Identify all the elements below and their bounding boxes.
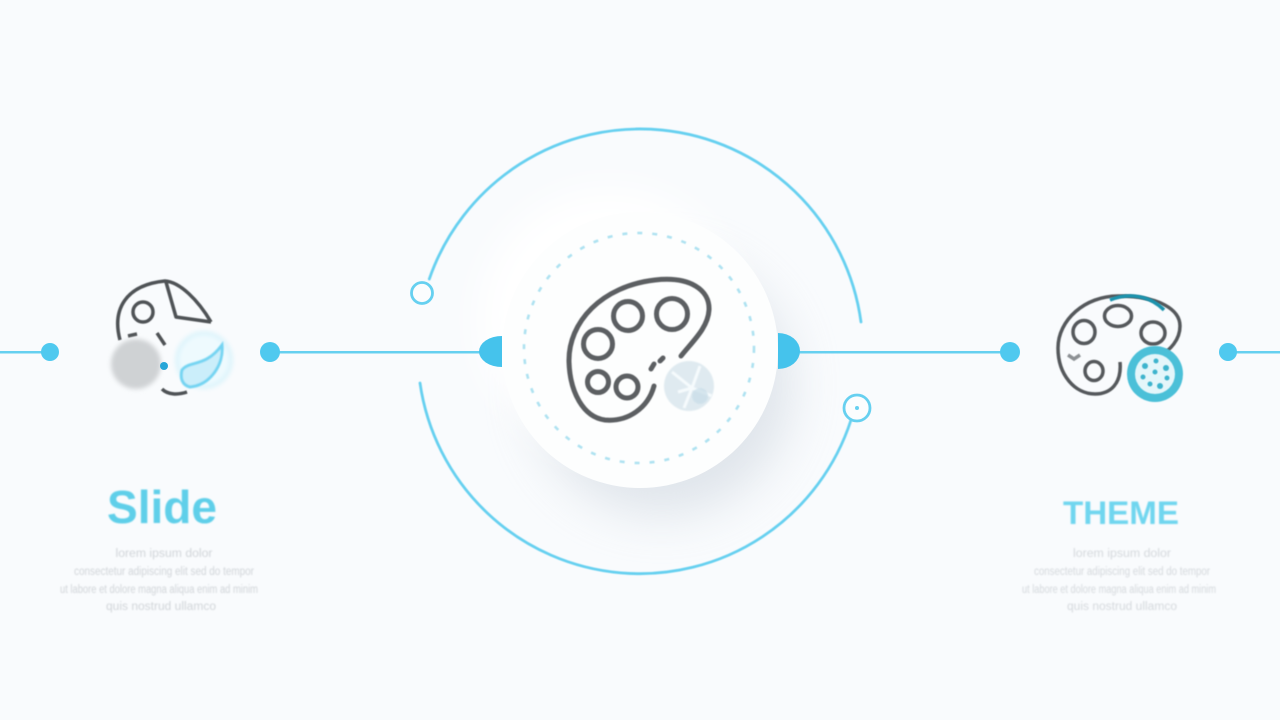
lower arc: [420, 383, 851, 574]
icon: left palette: [111, 281, 231, 394]
icon: crystal smudge on palette: [664, 361, 714, 411]
connector: left to centre: [260, 336, 502, 367]
teal badge: [1127, 346, 1183, 402]
connector: far right: [1219, 343, 1280, 361]
heading: Slide: Slide: [107, 481, 217, 533]
text block: right description: [1022, 548, 1216, 613]
heading: THEME: THEME: [1063, 495, 1179, 531]
text block: left description: ut labore et dolore magna aliqua enim ad minim: [60, 584, 258, 596]
dashed ring: [524, 233, 754, 463]
upper arc: [429, 129, 861, 322]
connector: far left: [0, 343, 59, 361]
connector: centre to right: [778, 333, 1020, 369]
text block: right description: ut labore et dolore magna aliqua enim ad minim: [1022, 584, 1216, 596]
central disc: [502, 212, 778, 488]
text block: right description: lorem ipsum dolor: [1073, 548, 1171, 560]
icon: right palette: [1058, 296, 1183, 402]
text block: right description: quis nostrud ullamco: [1067, 601, 1177, 613]
grey smudge: [111, 339, 161, 389]
ring marker: lower arc end: [844, 395, 870, 421]
icon: centre palette: [569, 279, 709, 420]
text block: left description: consectetur adipiscing elit sed do tempor: [74, 566, 254, 578]
text block: left description: quis nostrud ullamco: [106, 601, 216, 613]
text block: left description: [60, 548, 258, 613]
text block: right description: consectetur adipiscing elit sed do tempor: [1034, 566, 1210, 578]
disc shadow and glow: [480, 190, 792, 515]
ring marker: upper arc end: [412, 282, 432, 304]
blue glow splash: [177, 333, 231, 387]
teal highlight on rim: [1110, 296, 1164, 310]
blue dot: [160, 362, 168, 370]
text block: left description: lorem ipsum dolor: [116, 548, 213, 560]
